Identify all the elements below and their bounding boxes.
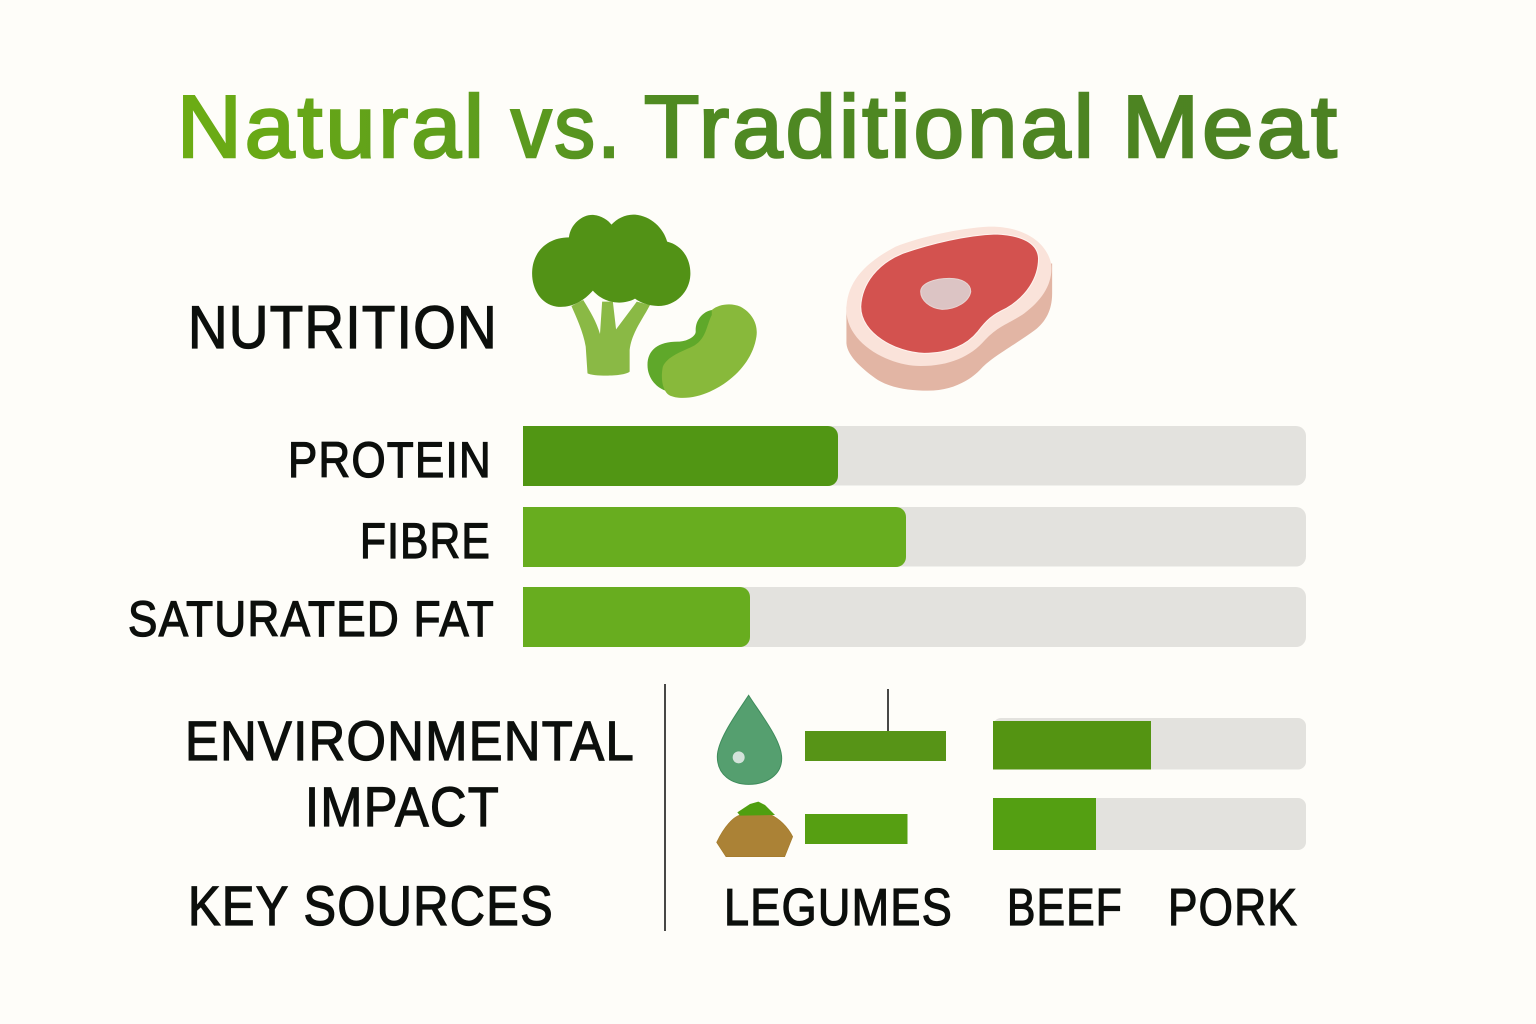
- heading: environmental impact: ENVIRONMENTAL: [185, 709, 635, 772]
- bar: saturated fat: [523, 587, 1306, 647]
- small bar: water: [805, 689, 946, 761]
- title: vs.: [511, 77, 623, 176]
- title: Traditional: [644, 77, 1097, 176]
- label: pork: PORK: [1168, 879, 1298, 937]
- heading: key sources: KEY SOURCES: [188, 874, 554, 937]
- icon: bean: [647, 304, 757, 398]
- icon: broccoli: [532, 215, 690, 376]
- title: Natural: [177, 77, 487, 176]
- title: [177, 77, 1340, 176]
- title: Meat: [1122, 77, 1340, 176]
- heading: nutrition: NUTRITION: [188, 294, 498, 361]
- icon: steak: [846, 227, 1052, 391]
- icon: water drop: [717, 695, 782, 784]
- small bar: land: [805, 814, 908, 844]
- heading: environmental impact: IMPACT: [305, 775, 500, 838]
- heading: environmental impact: [185, 709, 635, 838]
- bar: water meat: [993, 718, 1306, 770]
- label: legumes: LEGUMES: [724, 879, 953, 937]
- label: protein: PROTEIN: [288, 432, 492, 488]
- bar: fibre: [523, 507, 1306, 567]
- bar: protein: [523, 426, 1306, 486]
- label: beef: BEEF: [1007, 879, 1123, 937]
- label: fibre: FIBRE: [360, 513, 491, 569]
- bar: land meat: [993, 798, 1306, 850]
- label: saturated fat: SATURATED FAT: [128, 591, 495, 647]
- icon: soil mound: [717, 802, 793, 857]
